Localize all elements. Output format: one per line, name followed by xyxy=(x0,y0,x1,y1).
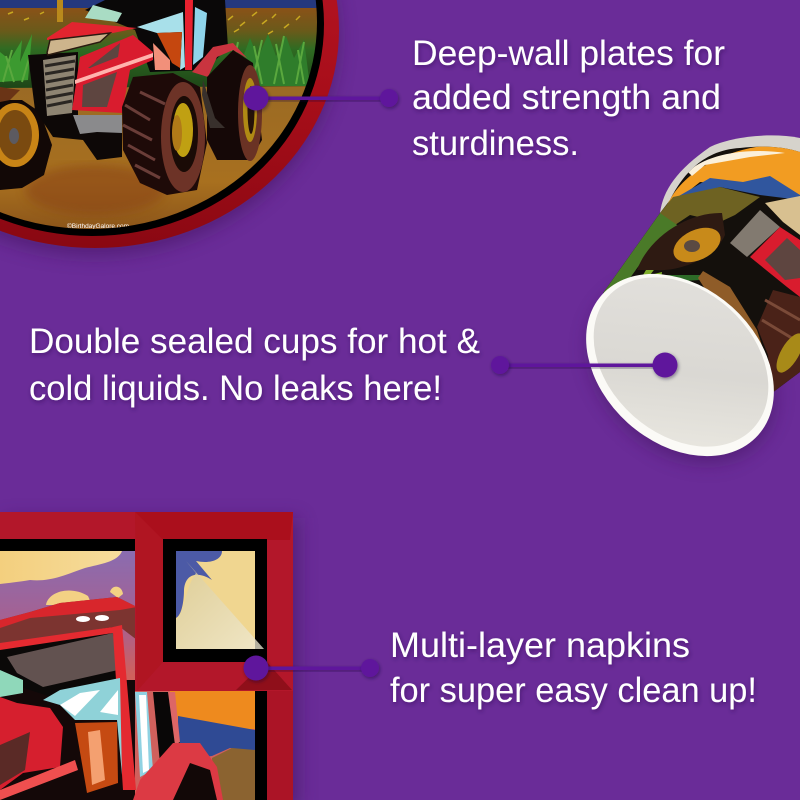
plate caption: sturdiness. xyxy=(412,124,579,163)
plate caption: Deep-wall plates for xyxy=(412,34,725,73)
plate tractor illustration xyxy=(0,0,317,229)
copyright line: ©BirthdayGalore.com xyxy=(67,222,129,230)
mountain xyxy=(679,176,800,198)
cup left wheel xyxy=(637,213,725,270)
plate inner marker xyxy=(244,86,268,110)
wheel and fender xyxy=(133,743,223,800)
cup connector line xyxy=(500,364,665,367)
napkin tractor illustration xyxy=(0,551,255,800)
cab roof xyxy=(0,597,137,647)
callout: cups xyxy=(29,322,678,408)
front wheel xyxy=(122,73,207,195)
side windows xyxy=(43,678,122,775)
cup caption xyxy=(29,322,480,408)
cup caption: cold liquids. No leaks here! xyxy=(29,369,442,408)
napkin caption xyxy=(390,626,757,710)
cup base xyxy=(550,237,800,493)
plate red rim xyxy=(0,0,339,248)
left wheel xyxy=(0,87,52,190)
mint windshield xyxy=(0,670,23,697)
napkin window frame xyxy=(163,539,267,662)
ground xyxy=(698,271,762,346)
napkin outer marker xyxy=(361,659,379,677)
callout: plates xyxy=(244,34,725,163)
panel: cup xyxy=(584,135,800,468)
cup rim xyxy=(660,135,800,230)
callout: napkins xyxy=(244,626,757,710)
windshield xyxy=(0,627,116,696)
cab dark underlayer xyxy=(0,680,135,800)
napkin caption: for super easy clean up! xyxy=(390,671,757,710)
plate connector line xyxy=(256,96,389,100)
plate caption xyxy=(412,34,725,163)
hood xyxy=(0,697,63,790)
cup body illustration xyxy=(603,146,800,392)
cup caption: Double sealed cups for hot & xyxy=(29,322,480,361)
cab xyxy=(85,0,228,72)
grille and chassis xyxy=(28,52,122,160)
tractor body xyxy=(72,35,153,113)
plate caption: added strength and xyxy=(412,78,721,117)
cup inner marker xyxy=(652,352,678,378)
cup tractor xyxy=(730,210,780,257)
napkin connector line xyxy=(256,666,370,670)
rear wheel xyxy=(207,50,262,161)
cup outer marker xyxy=(491,356,509,374)
napkin inner marker xyxy=(244,656,268,680)
field xyxy=(660,187,760,224)
napkin fold flap xyxy=(135,512,293,691)
panel: napkin xyxy=(0,512,299,800)
sky xyxy=(667,146,800,204)
rear fender xyxy=(192,43,247,77)
panel: plate xyxy=(0,0,339,260)
napkin red field xyxy=(0,512,293,800)
plate outer marker xyxy=(380,89,398,107)
napkin caption: Multi-layer napkins xyxy=(390,626,690,665)
